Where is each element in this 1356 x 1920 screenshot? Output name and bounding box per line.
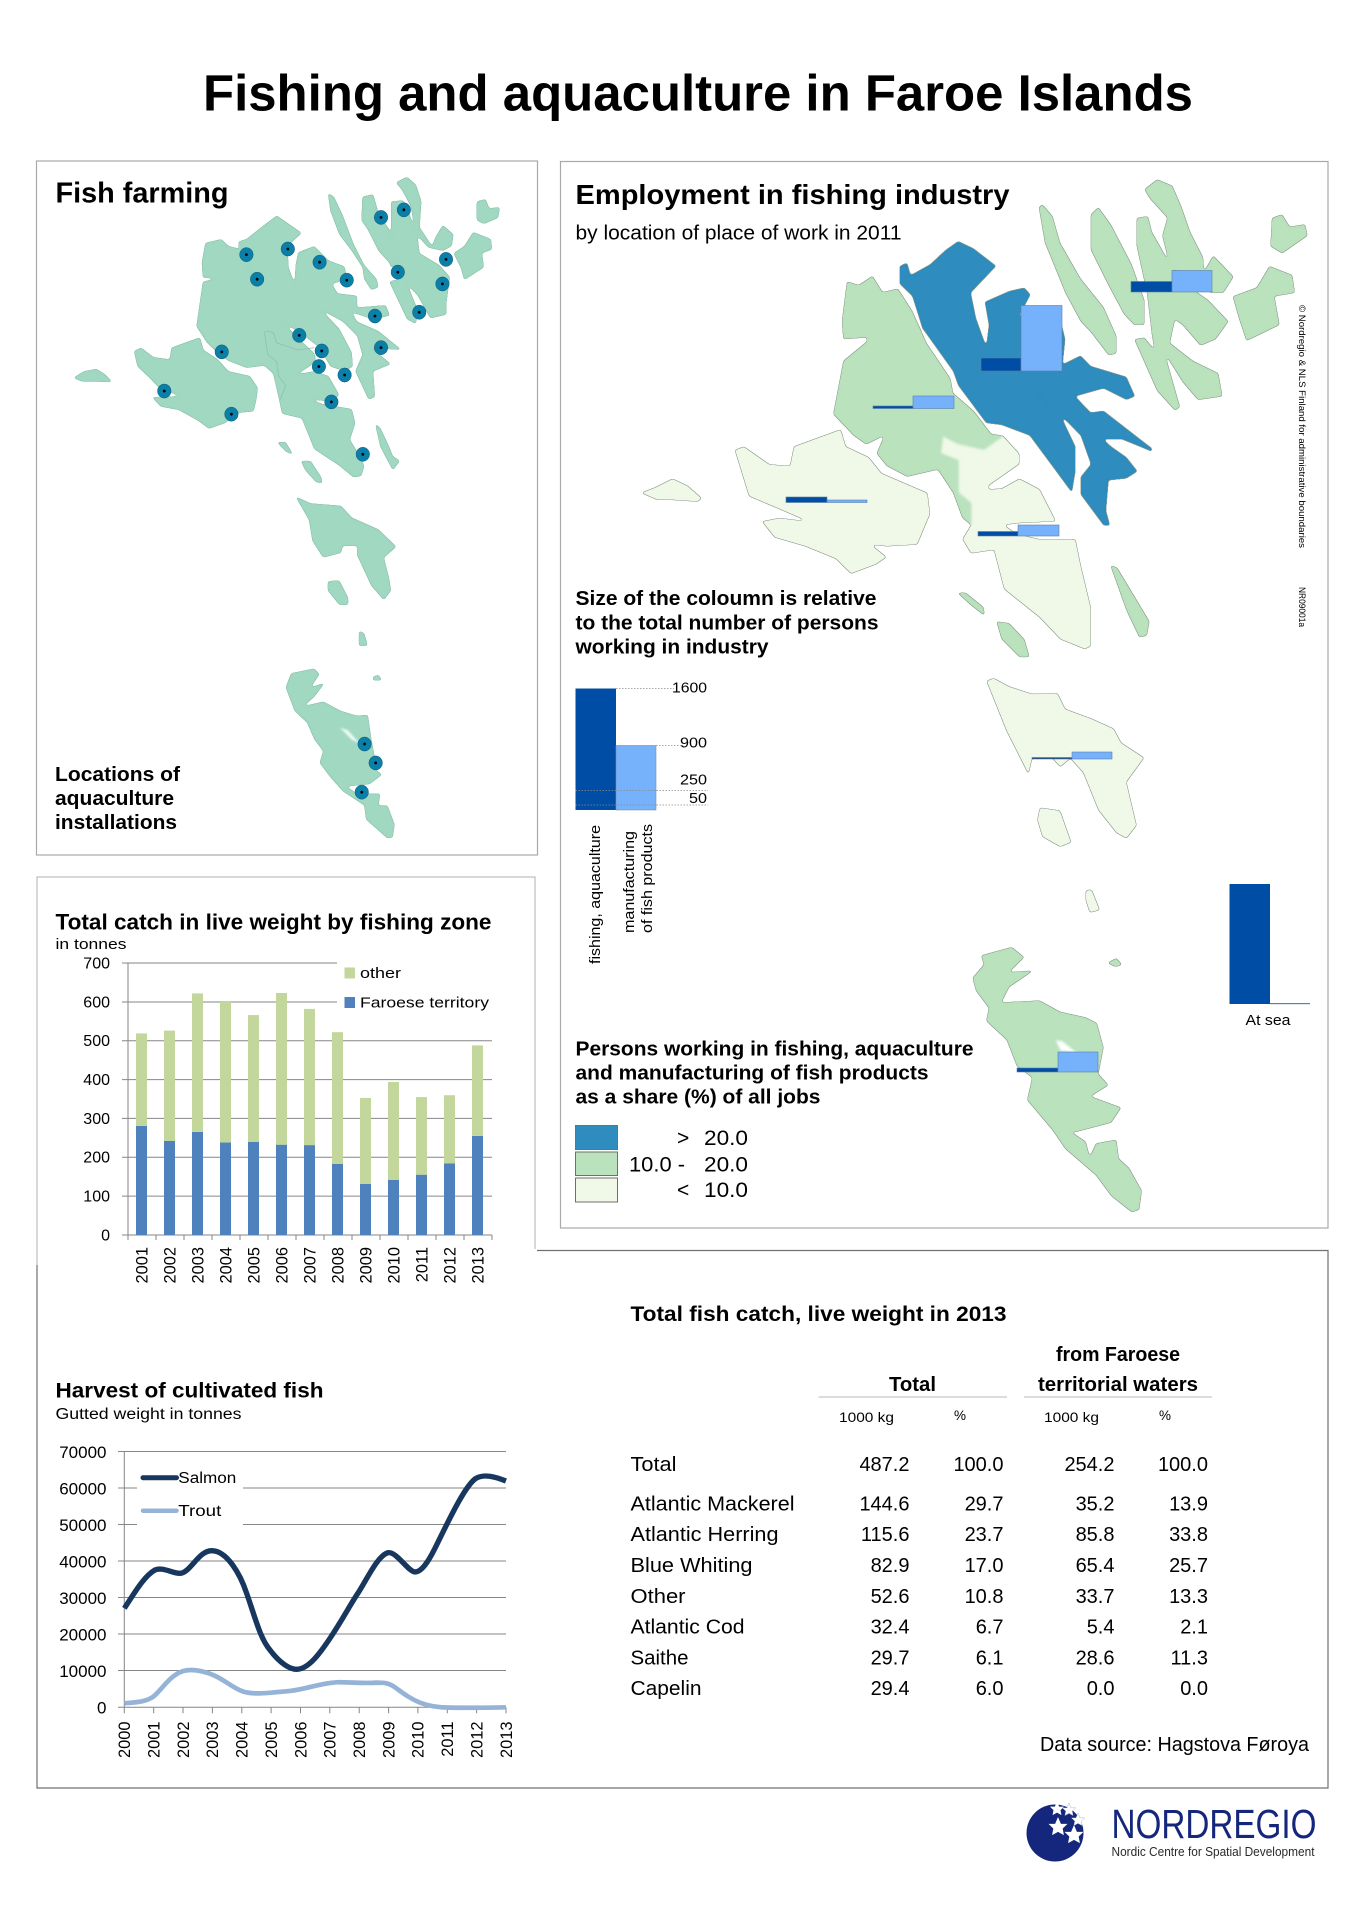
legend: share classes xyxy=(576,1126,748,1202)
x axis labels: 2002 xyxy=(175,1722,193,1758)
table column: total 1000 kg: 52.6 xyxy=(871,1586,910,1608)
x axis labels: 2007 xyxy=(322,1722,340,1758)
legend: column size scale: fishing, aquaculture xyxy=(588,825,604,964)
chart legend xyxy=(143,1470,236,1520)
legend heading: column size: Size of the coloumn is relative xyxy=(576,588,876,610)
x axis labels: 2007 xyxy=(302,1247,320,1283)
icon: globe with stars xyxy=(1026,1802,1085,1862)
x axis labels: 2010 xyxy=(410,1722,428,1758)
x axis labels: 2006 xyxy=(274,1247,292,1283)
panel outline: charts and table xyxy=(37,877,1328,1788)
table units: 1000 kg xyxy=(1044,1409,1099,1425)
x axis labels: 2002 xyxy=(162,1247,180,1283)
y axis labels xyxy=(59,1443,106,1718)
gridlines and axes xyxy=(118,1452,506,1713)
legend: share classes: > xyxy=(677,1127,689,1150)
table column: Faroese percent: 0.0 xyxy=(1180,1678,1208,1700)
table column: Faroese 1000 kg: 65.4 xyxy=(1076,1555,1114,1577)
chart legend: other xyxy=(360,965,401,982)
caption: locations of aquaculture installations xyxy=(55,763,180,834)
map: employment share by municipality, south xyxy=(972,678,1144,1212)
table column: Faroese 1000 kg: 33.7 xyxy=(1076,1586,1114,1608)
table column: total percent: 29.7 xyxy=(965,1494,1004,1516)
subheading: location: by location of place of work in 2011 xyxy=(576,222,902,244)
legend heading: column size: to the total number of persons xyxy=(576,612,878,634)
table column: total percent xyxy=(953,1454,1004,1700)
heading: fish farming: Fish farming xyxy=(56,178,228,210)
x axis labels: 2006 xyxy=(292,1722,310,1758)
table units: 1000 kg xyxy=(839,1409,894,1425)
table row labels: Atlantic Cod xyxy=(630,1616,744,1638)
map: employment share by municipality, north xyxy=(641,179,1308,657)
y axis labels: 70000 xyxy=(59,1443,106,1462)
legend heading: share of jobs: Persons working in fishing, aquaculture xyxy=(576,1038,974,1060)
y axis labels: 700 xyxy=(83,956,110,972)
table title: Total fish catch, live weight in 2013 xyxy=(630,1303,1006,1326)
x axis labels: 2010 xyxy=(386,1247,404,1283)
y axis labels: 600 xyxy=(83,994,110,1012)
table row labels: Atlantic Mackerel xyxy=(630,1494,794,1516)
heading: employment: Employment in fishing industry xyxy=(576,179,1010,210)
table column: total percent: 6.7 xyxy=(976,1616,1004,1638)
y axis labels: 500 xyxy=(83,1033,110,1050)
panel: fish farming xyxy=(36,161,538,855)
logo: Nordregio xyxy=(1026,1801,1316,1862)
caption: locations of aquaculture installations: Locations of xyxy=(55,763,180,786)
table column: total 1000 kg: 144.6 xyxy=(859,1494,910,1516)
y axis labels: 100 xyxy=(83,1188,110,1206)
legend heading: share of jobs xyxy=(576,1038,974,1108)
table column: total 1000 kg: 115.6 xyxy=(861,1524,910,1546)
x axis labels: 2005 xyxy=(263,1722,281,1758)
legend: share classes: 10.0 xyxy=(704,1179,748,1202)
table column: total percent: 100.0 xyxy=(953,1454,1004,1476)
table row labels: Total xyxy=(630,1454,676,1476)
markers: aquaculture locations xyxy=(157,203,453,799)
caption: locations of aquaculture installations: aquaculture xyxy=(55,787,174,810)
y axis labels: 400 xyxy=(83,1072,110,1089)
table column: Faroese percent: 11.3 xyxy=(1171,1648,1208,1670)
x axis labels: 2012 xyxy=(442,1247,460,1283)
table column: Faroese 1000 kg: 85.8 xyxy=(1076,1524,1114,1546)
table column: total 1000 kg: 82.9 xyxy=(871,1555,910,1577)
table headers: territorial waters xyxy=(1038,1374,1198,1396)
x axis labels: 2004 xyxy=(218,1247,236,1283)
table row labels: Atlantic Herring xyxy=(630,1524,778,1546)
table column: total percent: 10.8 xyxy=(965,1586,1004,1608)
table column: total 1000 kg: 29.7 xyxy=(871,1648,910,1670)
table units: % xyxy=(1159,1407,1171,1423)
x axis labels: 2003 xyxy=(204,1722,222,1758)
y axis labels: 10000 xyxy=(59,1662,106,1681)
table: total fish catch 2013 xyxy=(630,1303,1310,1756)
chart legend: Salmon xyxy=(178,1470,236,1487)
at sea column xyxy=(1230,884,1310,1029)
legend: column size scale: manufacturing xyxy=(622,831,638,933)
table column: Faroese percent: 13.3 xyxy=(1169,1586,1208,1608)
x axis labels: 2005 xyxy=(246,1247,264,1283)
table column: total percent: 6.0 xyxy=(976,1678,1004,1700)
chart legend xyxy=(344,965,490,1012)
bars: Faroese territory xyxy=(136,1126,483,1235)
table column: Faroese 1000 kg: 254.2 xyxy=(1064,1454,1114,1476)
y axis labels: 20000 xyxy=(59,1626,106,1644)
y axis labels: 0 xyxy=(97,1698,106,1718)
tagline: Nordic Centre for Spatial Development xyxy=(1112,1844,1315,1859)
table column: Faroese percent: 2.1 xyxy=(1180,1616,1208,1638)
gridlines and axes xyxy=(122,963,492,1240)
chart: harvest of cultivated fish xyxy=(56,1378,516,1758)
chart: total catch by fishing zone xyxy=(56,910,492,1283)
x axis labels: 2001 xyxy=(134,1247,152,1283)
table column: Faroese 1000 kg: 28.6 xyxy=(1076,1648,1114,1670)
table row labels xyxy=(630,1454,794,1700)
table column: total 1000 kg xyxy=(859,1454,910,1700)
table row labels: Blue Whiting xyxy=(630,1555,752,1577)
legend: column size scale xyxy=(576,680,708,964)
y axis labels: 30000 xyxy=(59,1589,106,1608)
table column: Faroese 1000 kg: 35.2 xyxy=(1076,1494,1114,1516)
table column: total percent: 23.7 xyxy=(965,1524,1004,1546)
legend heading: share of jobs: and manufacturing of fish products xyxy=(576,1062,928,1084)
y axis labels: 200 xyxy=(83,1150,110,1166)
table column: Faroese percent: 25.7 xyxy=(1169,1555,1208,1577)
x axis labels: 2009 xyxy=(358,1247,376,1283)
table column: total 1000 kg: 32.4 xyxy=(871,1616,910,1638)
x axis labels: 2013 xyxy=(470,1247,488,1283)
table column: Faroese percent: 100.0 xyxy=(1158,1454,1208,1476)
table column: Faroese percent: 13.9 xyxy=(1169,1494,1208,1516)
x axis labels xyxy=(116,1722,516,1758)
table row labels: Capelin xyxy=(630,1678,702,1700)
legend: share classes: 20.0 xyxy=(704,1154,748,1176)
legend: column size scale: 900 xyxy=(680,736,707,752)
table column: Faroese 1000 kg: 0.0 xyxy=(1087,1678,1114,1700)
map column bars xyxy=(786,270,1212,1072)
table column: total percent: 17.0 xyxy=(965,1555,1004,1577)
x axis labels xyxy=(134,1247,488,1283)
legend: column size scale: 50 xyxy=(689,791,707,807)
table headers: Total xyxy=(889,1374,936,1396)
x axis labels: 2003 xyxy=(190,1247,208,1283)
legend heading: column size xyxy=(574,588,878,658)
x axis labels: 2004 xyxy=(234,1722,252,1758)
panel: employment in fishing industry xyxy=(560,162,1328,1228)
y axis labels: 50000 xyxy=(59,1516,106,1535)
copyright note: © Nordregio & NLS Finland for administrative boundaries xyxy=(1296,305,1307,548)
chart legend: Trout xyxy=(178,1503,222,1520)
line: trout xyxy=(124,1670,506,1708)
x axis labels: 2000 xyxy=(116,1722,134,1758)
legend: column size scale: of fish products xyxy=(640,824,656,933)
line: salmon xyxy=(124,1476,506,1669)
legend: share classes: < xyxy=(677,1179,689,1202)
table column: Faroese percent: 33.8 xyxy=(1169,1524,1208,1546)
table units: % xyxy=(954,1407,966,1423)
x axis labels: 2011 xyxy=(414,1247,432,1282)
x axis labels: 2011 xyxy=(439,1722,457,1757)
table column: total 1000 kg: 29.4 xyxy=(871,1678,910,1700)
chart title: Total catch in live weight by fishing zone xyxy=(56,910,491,934)
map reference code: NR09001a xyxy=(1296,587,1307,628)
title: Fishing and aquaculture in Faroe Islands xyxy=(203,64,1193,122)
chart subtitle: Gutted weight in tonnes xyxy=(56,1406,242,1423)
chart title: Harvest of cultivated fish xyxy=(56,1378,324,1402)
y axis labels: 0 xyxy=(101,1228,110,1244)
legend: share classes: 20.0 xyxy=(704,1127,748,1150)
x axis labels: 2008 xyxy=(330,1247,348,1283)
chart subtitle: in tonnes xyxy=(56,936,126,953)
legend heading: column size: working in industry xyxy=(574,636,769,658)
x axis labels: 2012 xyxy=(468,1722,486,1758)
chart legend: Faroese territory xyxy=(360,994,490,1012)
table units xyxy=(839,1407,1171,1425)
table column: total 1000 kg: 487.2 xyxy=(859,1454,910,1476)
x axis labels: 2008 xyxy=(351,1722,369,1758)
y axis labels xyxy=(83,956,110,1244)
bars: other xyxy=(136,993,483,1184)
table column: total percent: 6.1 xyxy=(976,1648,1004,1670)
table column: Faroese percent xyxy=(1158,1454,1208,1700)
table row labels: Other xyxy=(630,1586,686,1608)
x axis labels: 2009 xyxy=(380,1722,398,1758)
map: aquaculture islands xyxy=(73,177,500,838)
legend: share classes: 10.0 - xyxy=(629,1154,685,1176)
legend: column size scale: 1600 xyxy=(672,680,707,696)
y axis labels: 60000 xyxy=(59,1480,106,1498)
y axis labels: 40000 xyxy=(59,1552,106,1572)
table column: Faroese 1000 kg: 5.4 xyxy=(1087,1616,1114,1638)
data source: Data source: Hagstova Føroya xyxy=(1040,1734,1310,1756)
caption: locations of aquaculture installations: installations xyxy=(55,811,177,834)
table headers: from Faroese xyxy=(1056,1344,1180,1366)
legend heading: share of jobs: as a share (%) of all jobs xyxy=(576,1086,820,1108)
legend: column size scale: 250 xyxy=(680,772,707,788)
table row labels: Saithe xyxy=(630,1648,688,1670)
table column: Faroese 1000 kg xyxy=(1064,1454,1114,1700)
x axis labels: 2013 xyxy=(498,1722,516,1758)
x axis labels: 2001 xyxy=(146,1722,164,1758)
at sea column: At sea xyxy=(1246,1012,1291,1029)
table headers xyxy=(889,1344,1198,1396)
y axis labels: 300 xyxy=(83,1111,110,1128)
